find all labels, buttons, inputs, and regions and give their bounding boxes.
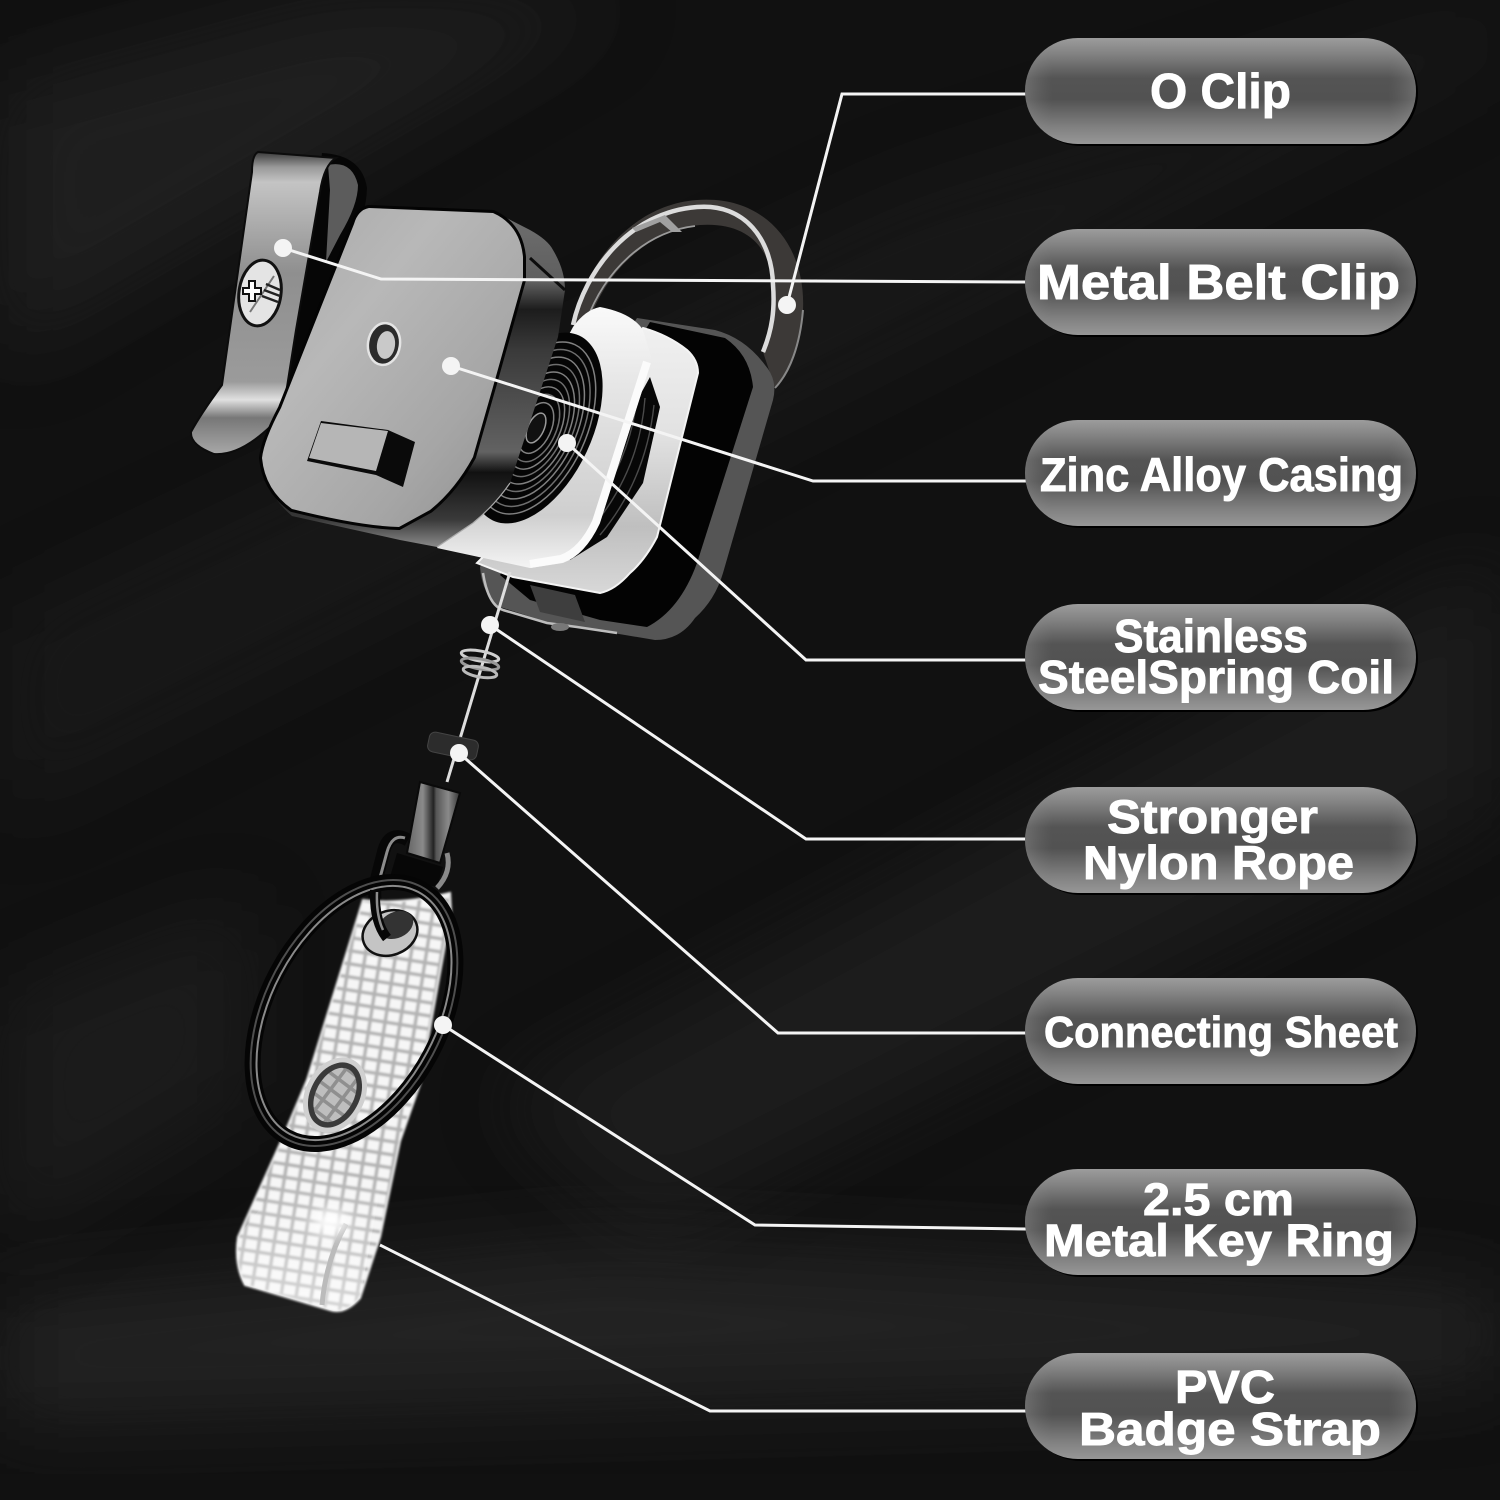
panel: label Metal Belt Clip [1025, 229, 1418, 337]
white gasket front [437, 307, 652, 568]
leader: Stainless Steel Spring Coil [558, 434, 1030, 660]
zinc alloy casing side wall [262, 208, 565, 547]
strap top eyelet [356, 903, 424, 963]
black gap with coil edge [560, 377, 660, 560]
leader lines and dots [274, 94, 1030, 1411]
text: 2.5 cm Metal Key Ring: Metal Key Ring [1044, 1215, 1394, 1266]
zinc alloy casing front plate [262, 208, 523, 527]
swivel barrel connector [390, 782, 460, 887]
belt clip front blade [191, 152, 336, 454]
spring coil [442, 312, 630, 544]
panel: label Stainless SteelSpring Coil [1025, 604, 1418, 712]
swivel loop [375, 837, 448, 938]
strap lower snap hole [294, 1050, 376, 1140]
panel: label Zinc Alloy Casing [1025, 420, 1418, 528]
text: Zinc Alloy Casing: Zinc Alloy Casing [1040, 448, 1403, 501]
text: PVC Badge Strap: PVC [1175, 1361, 1275, 1413]
text: O Clip: O Clip [1150, 65, 1291, 119]
panel: label Connecting Sheet [1025, 978, 1418, 1086]
text: Stainless SteelSpring Coil: SteelSpring Coil [1038, 651, 1394, 703]
belt clip rear loop [280, 153, 367, 410]
leader: Zinc Alloy Casing [442, 357, 1028, 481]
panel: label PVC Badge Strap [1025, 1353, 1418, 1461]
text: PVC Badge Strap: Badge Strap [1079, 1403, 1381, 1455]
casing slider button [307, 421, 415, 487]
small spring on rope [460, 648, 500, 680]
leader: Metal Belt Clip [274, 239, 1028, 282]
nylon rope wire [447, 572, 510, 782]
text: Stainless SteelSpring Coil: Stainless [1114, 610, 1308, 662]
swivel loop front [375, 890, 387, 938]
back case [480, 318, 774, 640]
metal key ring [208, 845, 500, 1181]
text: Stronger Nylon Rope: Stronger [1107, 790, 1318, 843]
icon: screw [235, 257, 285, 329]
connecting sheet [426, 731, 480, 761]
leader: O Clip [778, 94, 1026, 314]
panel: label O Clip [1025, 38, 1418, 146]
leader: Stronger Nylon Rope [481, 616, 1026, 839]
text: Connecting Sheet: Connecting Sheet [1044, 1008, 1398, 1057]
product illustration: retractable badge reel exploded view [191, 152, 803, 1311]
casing rivet [365, 321, 403, 367]
icon: O clip ring [572, 200, 803, 388]
text: Metal Belt Clip: Metal Belt Clip [1037, 256, 1400, 310]
panel: label 2.5 cm Metal Key Ring [1025, 1169, 1418, 1277]
leader: Metal Key Ring [434, 1016, 1026, 1229]
text: Stronger Nylon Rope: Nylon Rope [1083, 836, 1354, 889]
text: 2.5 cm Metal Key Ring: 2.5 cm [1143, 1174, 1294, 1225]
white gasket rear [477, 328, 698, 593]
leader: Connecting Sheet [450, 744, 1026, 1033]
PVC badge strap [237, 893, 451, 1311]
leader: PVC Badge Strap [380, 1245, 1026, 1411]
panel: label Stronger Nylon Rope [1025, 787, 1418, 895]
